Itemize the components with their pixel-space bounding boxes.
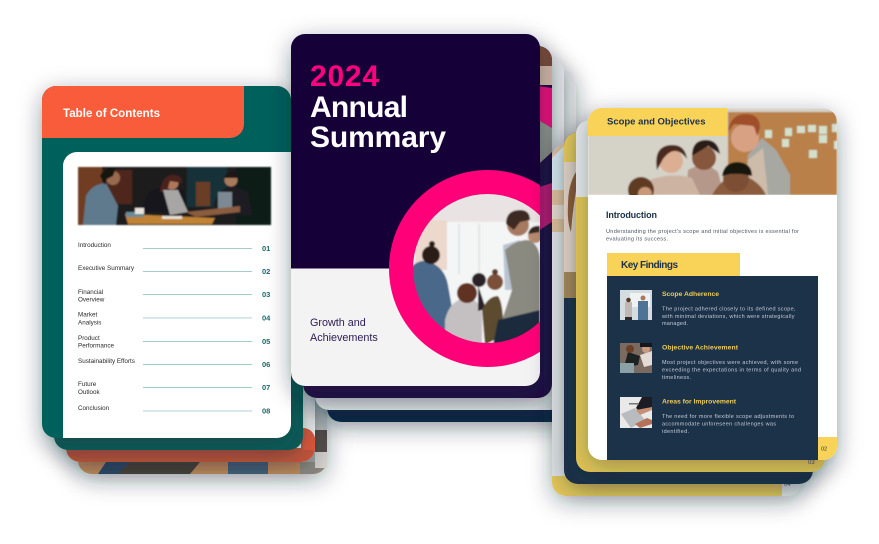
light lower band [291,268,540,386]
row: 05: 05 [262,337,270,346]
row: 07: Outlook [78,389,101,396]
title: Annual [310,91,408,124]
finding: objective achievement: Objective Achievement [662,344,739,352]
row: 01: Introduction [78,242,111,249]
back page: yellow [576,120,825,472]
finding: areas for improvement: Areas for Improvement [662,398,737,406]
ring with team photo [389,170,540,367]
heading tab: key findings [607,253,740,276]
row: 05: Performance [78,342,115,350]
back page: teal [54,98,303,450]
row: 06: Sustainability Efforts [78,358,135,365]
finding: objective achievement: exceeding the expectations in terms of quality and [662,368,801,374]
row: 04 [78,312,271,326]
heading tab: scope and objectives: Scope and Objectives [607,116,706,128]
row: 08: 08 [262,406,270,416]
back page: pink and navy [303,46,552,398]
row: 04: Analysis [78,320,101,326]
subtitle [310,317,378,344]
finding: objective achievement: timeliness. [662,375,691,381]
finding: scope adherence: Scope Adherence [662,291,719,298]
heading tab: table of contents [42,86,244,138]
introduction text: Introduction [606,210,657,220]
back page: yellow and grey: 04 [784,482,791,488]
title: 2024 [310,60,379,93]
panel: annual summary cover [291,34,586,386]
row: 04: Market [78,312,97,318]
thumbnail: two colleagues at desk [620,343,652,373]
right stack of back pages [552,120,825,496]
row: 07: Future [78,381,97,388]
thumbnail: two people at whiteboard [620,290,652,320]
row: 06 [78,358,270,369]
back page: orange [66,110,315,462]
thumbnail: hands on laptop [620,397,652,428]
finding: areas for improvement [620,397,794,435]
finding: areas for improvement: accommodate unforeseen challenges was [662,422,776,428]
finding: scope adherence: managed. [662,321,688,327]
finding: areas for improvement: The need for more flexible scope adjustments to [662,414,794,420]
row: 08: Conclusion [78,405,110,412]
row: 01: 01 [262,244,270,253]
heading tab: key findings: Key Findings [621,260,678,271]
row: 03 [78,289,270,304]
row: 03: Financial [78,289,103,296]
yellow page corner with number [817,437,837,460]
heading tab: scope and objectives [588,108,727,136]
middle stack of back pages [303,46,576,422]
introduction text [606,210,799,242]
row: 02 [78,265,270,276]
row: 06: 06 [262,360,270,369]
back page: yellow: 03 [808,460,815,466]
row: 03: Overview [78,296,105,304]
introduction text: Understanding the project's scope and initial objectives is essential for [606,229,799,235]
back page: photo [78,122,327,474]
left stack of back pages [54,98,327,474]
row: 01 [78,242,270,253]
photo: team standing in room [413,194,540,343]
yellow page corner with number: 02 [821,446,827,452]
back page: yellow and grey [552,144,801,496]
panel: findings list [607,276,818,460]
heading tab: table of contents: Table of Contents [63,108,160,120]
panel: table of contents [42,86,291,438]
row: 07 [78,381,270,396]
subtitle: Achievements [310,332,378,344]
list: contents [78,242,271,416]
panel: scope and objectives page [588,108,837,460]
finding: areas for improvement: identified. [662,429,689,435]
title [310,60,446,154]
back page: light with navy foot [327,70,576,422]
finding: objective achievement: Most project objectives were achieved, with some [662,360,798,366]
row: 04: 04 [262,314,271,322]
row: 02: 02 [262,267,270,276]
introduction text: evaluating its success. [606,236,668,242]
row: 08 [78,405,270,416]
row: 02: Executive Summary [78,265,135,272]
back page: navy [564,132,813,484]
finding: scope adherence: The project adhered closely to its defined scope, [662,306,796,312]
row: 07: 07 [262,383,270,392]
row: 05: Product [78,335,100,342]
photo: team smiling at laptop [588,108,837,203]
row: 03: 03 [262,290,270,299]
finding: objective achievement [620,343,801,381]
title: Summary [310,121,446,154]
finding: scope adherence: with minimal deviations, which were strategically [661,314,795,320]
white content sheet [63,152,291,438]
photo: team at cafe table [78,167,271,225]
subtitle: Growth and [310,317,366,329]
row: 05 [78,335,270,350]
finding: scope adherence [620,290,796,327]
back page: light [315,58,564,410]
